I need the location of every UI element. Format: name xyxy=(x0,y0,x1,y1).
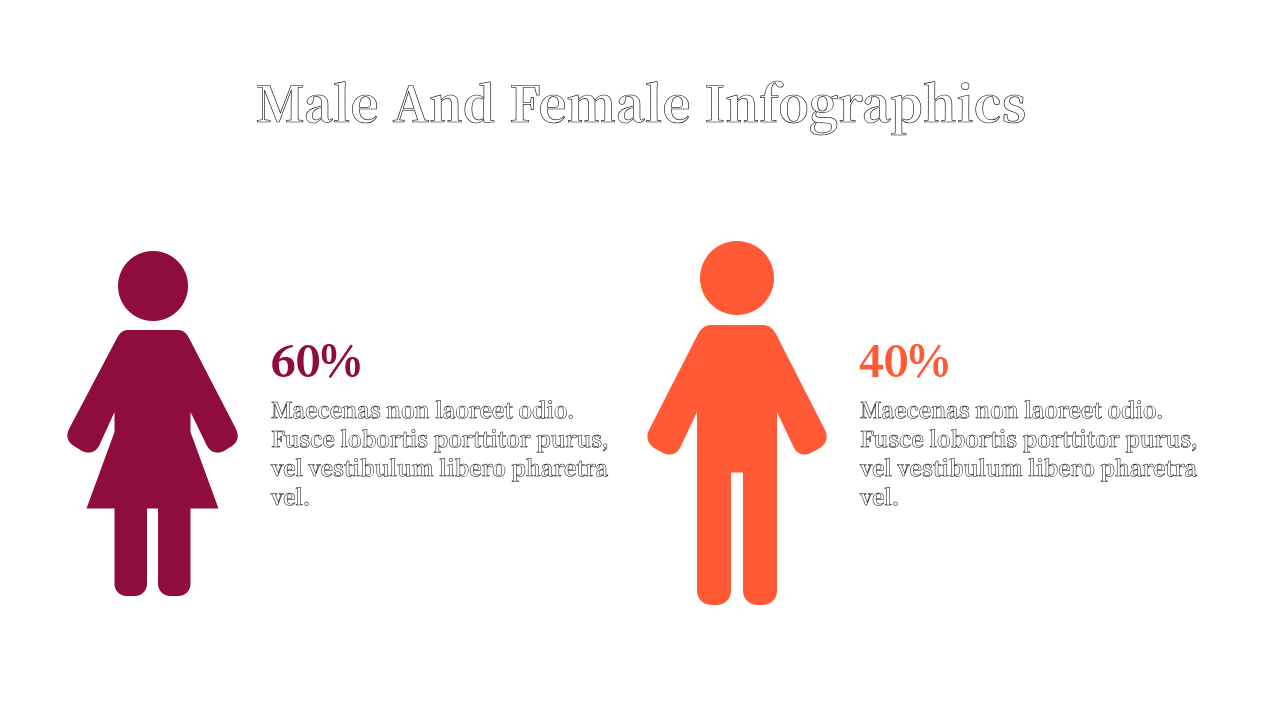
female description: vel vestibulum libero pharetra xyxy=(271,452,608,483)
female description: Fusce lobortis porttitor purus, xyxy=(271,423,609,454)
title: Male And Female Infographics xyxy=(256,66,1026,137)
male description: Maecenas non laoreet odio. xyxy=(860,394,1163,425)
female description xyxy=(270,394,609,512)
male description xyxy=(860,394,1198,512)
male description: vel. xyxy=(860,481,899,512)
icon: male figure xyxy=(647,241,827,605)
female description: Maecenas non laoreet odio. xyxy=(271,394,574,425)
female description: vel. xyxy=(271,481,310,512)
male description: Fusce lobortis porttitor purus, xyxy=(860,423,1198,454)
icon: female figure xyxy=(67,251,238,596)
female percentage: 60% xyxy=(271,329,361,389)
male description: vel vestibulum libero pharetra xyxy=(860,452,1197,483)
male percentage: 40% xyxy=(859,329,949,389)
